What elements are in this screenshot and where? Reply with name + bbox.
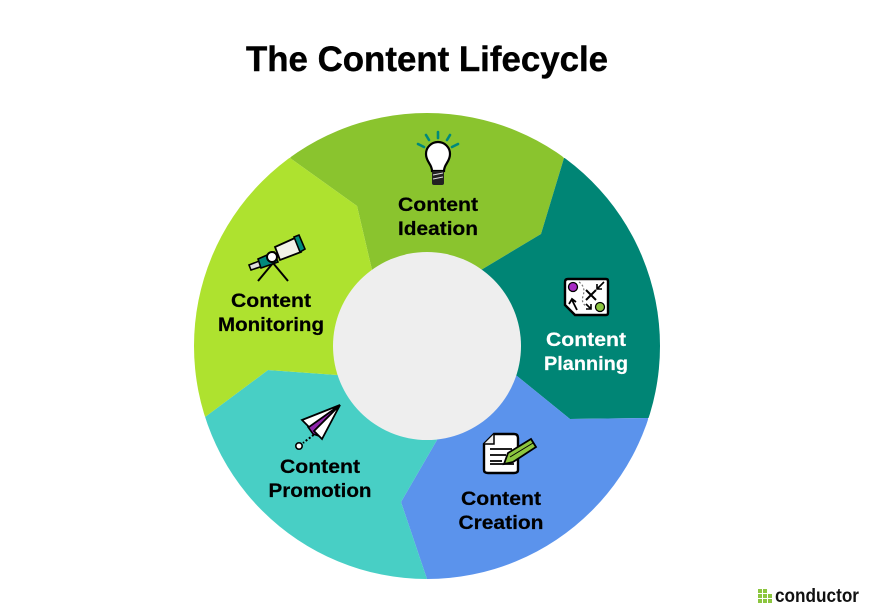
title: The Content Lifecycle: [246, 40, 608, 79]
label: Content Monitoring line 1: Content: [231, 290, 312, 312]
label: Content Promotion line 1: Content: [280, 456, 361, 478]
icon: paper plane: [296, 405, 340, 449]
label: Content Monitoring line 2: Monitoring: [218, 314, 324, 336]
center circle: [333, 252, 521, 440]
icon: light bulb: [418, 132, 458, 185]
label: Content Planning line 1: Content: [546, 329, 627, 351]
icon: telescope: [249, 235, 305, 281]
segment: Content Monitoring: [194, 158, 372, 417]
label: Content Creation line 1: Content: [461, 488, 542, 510]
label: Content Ideation line 2: Ideation: [398, 218, 478, 240]
label: Content Ideation line 1: Content: [398, 194, 479, 216]
donut chart: content lifecycle: [194, 113, 660, 579]
logo: conductor: conductor: [775, 586, 860, 607]
label: Content Creation line 2: Creation: [458, 512, 544, 534]
segment: Content Creation: [401, 376, 648, 579]
icon: document and pencil: [484, 434, 536, 473]
segment: Content Ideation: [290, 113, 564, 270]
segment: Content Planning: [482, 158, 660, 419]
label: Content Planning line 2: Planning: [544, 353, 628, 375]
label: Content Promotion line 2: Promotion: [268, 480, 372, 502]
icon: map: [565, 279, 608, 315]
segment: Content Promotion: [205, 370, 437, 579]
